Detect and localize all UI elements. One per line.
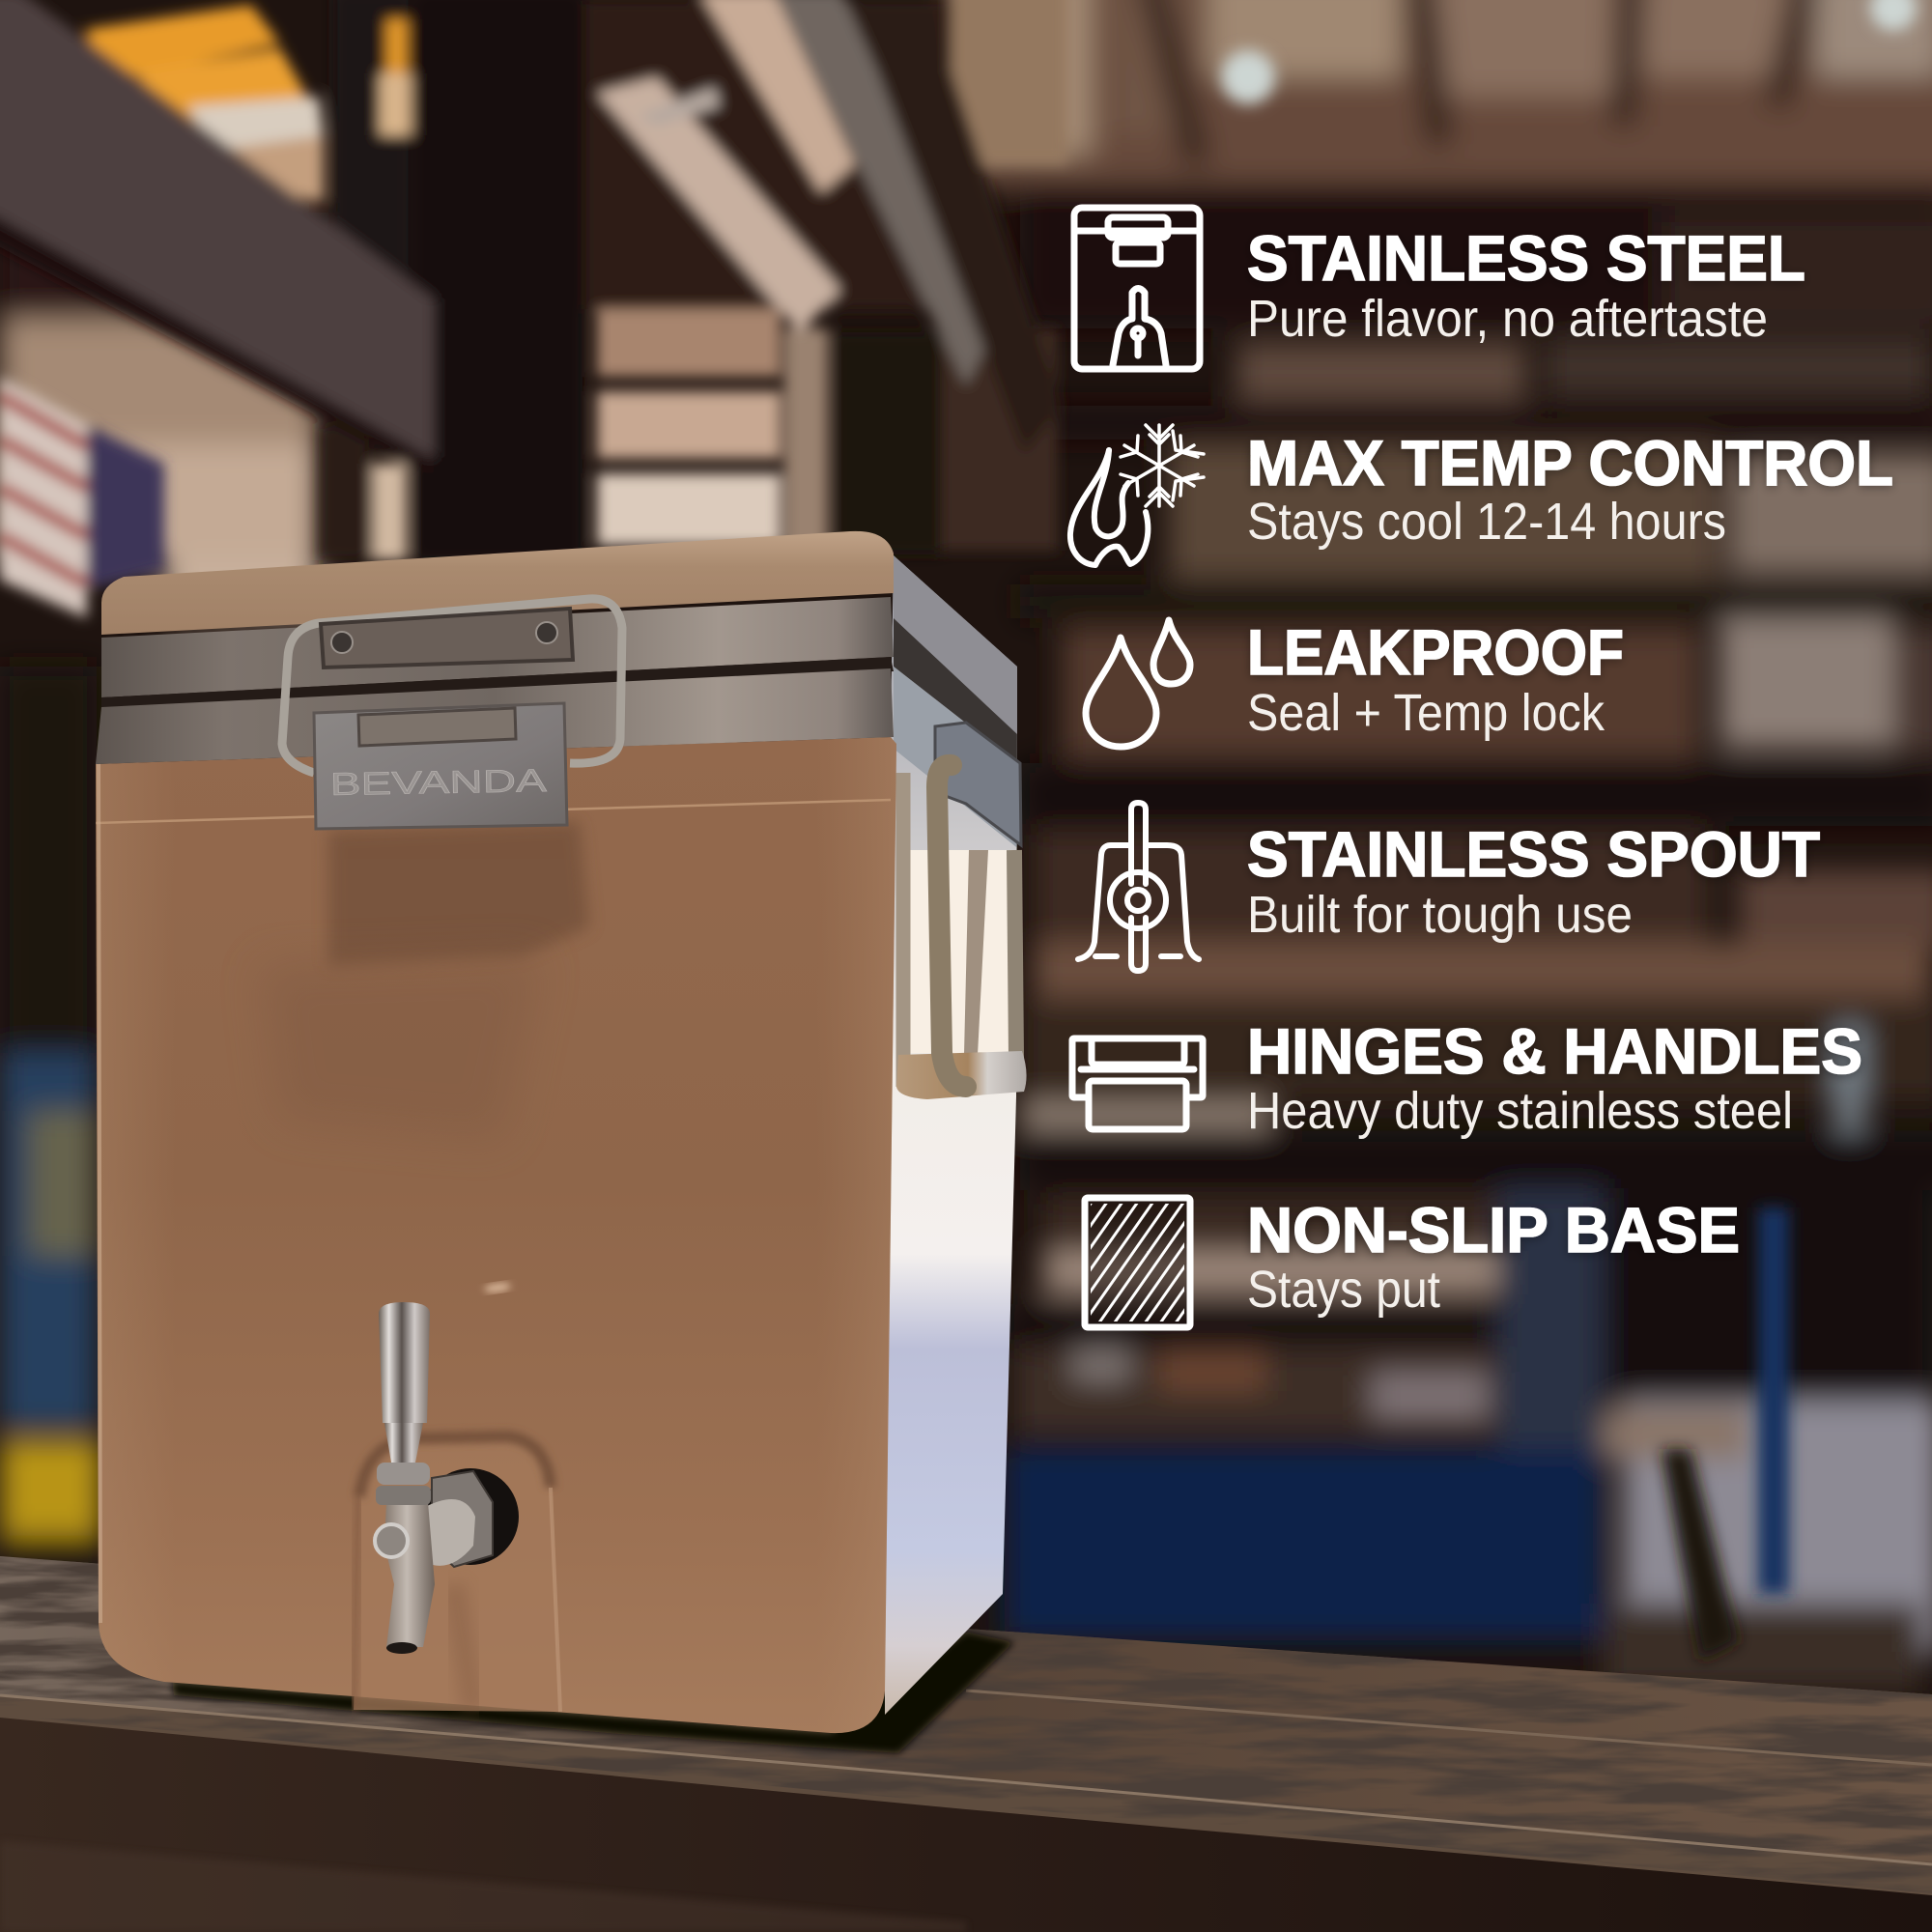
shadow beneath cooler: [172, 1632, 1014, 1753]
subtext: Stays put: [1247, 1261, 1440, 1319]
latch top plate: [321, 609, 573, 668]
cooler metal bands: [96, 597, 894, 764]
feature: leakproof: [1086, 616, 1624, 747]
heading: LEAKPROOF: [1247, 616, 1624, 688]
feature: hinges and handles: [1072, 1015, 1862, 1140]
subtext: Heavy duty stainless steel: [1247, 1082, 1793, 1140]
cooler front body: [96, 737, 896, 1733]
cooler product: [96, 531, 1034, 1733]
feature: max temp control: [1070, 425, 1893, 565]
icon: spout: [1078, 803, 1199, 971]
subtext: Stays cool 12-14 hours: [1247, 493, 1726, 551]
latch wire handle: [282, 599, 622, 773]
heading: STAINLESS SPOUT: [1247, 818, 1820, 890]
spout tap: [375, 1302, 519, 1654]
feature: stainless spout: [1078, 803, 1820, 971]
heading: MAX TEMP CONTROL: [1247, 427, 1893, 498]
subtext: Seal + Temp lock: [1247, 684, 1605, 742]
heading: NON-SLIP BASE: [1247, 1194, 1740, 1265]
heading: HINGES & HANDLES: [1247, 1015, 1862, 1087]
brand name: BEVANDA: [329, 762, 547, 802]
wooden table surface: [0, 1546, 1932, 1932]
feature: stainless steel: [1074, 208, 1805, 369]
subtext: Built for tough use: [1247, 886, 1633, 944]
subtext: Pure flavor, no aftertaste: [1247, 290, 1768, 348]
feature list: [1070, 208, 1893, 1327]
cooler lid: [101, 531, 894, 635]
side handle: [896, 723, 1027, 1099]
icon: water drops: [1086, 620, 1190, 747]
cooler spout recess: [354, 1436, 560, 1712]
icon: flame and snowflake: [1070, 425, 1204, 565]
icon: hatched base: [1085, 1198, 1190, 1327]
feature: non-slip base: [1085, 1194, 1740, 1327]
heading: STAINLESS STEEL: [1247, 222, 1805, 294]
cooler stainless side panel: [885, 555, 1017, 1715]
icon: cooler outline: [1074, 208, 1200, 369]
icon: hinge: [1072, 1038, 1203, 1129]
latch plate with logo: [314, 703, 567, 829]
